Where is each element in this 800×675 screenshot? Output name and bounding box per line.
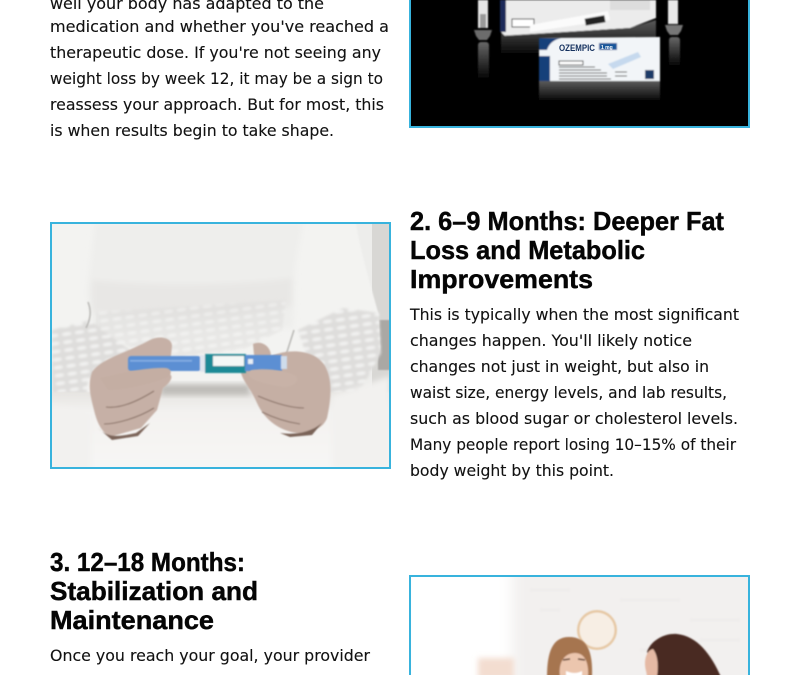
left hand: [90, 338, 172, 440]
section 2 body text: This is typically when the most significant: [409, 305, 739, 324]
table: [52, 392, 332, 467]
front product box: [539, 37, 660, 100]
section 2 body text: changes happen. You'll likely notice: [410, 331, 692, 350]
background wall at right: [372, 224, 389, 383]
bright window area: [411, 577, 512, 675]
section 2 heading: Loss and Metabolic: [410, 235, 645, 265]
left woman: [547, 637, 592, 675]
section 2 body text: waist size, energy levels, and lab results,: [410, 383, 727, 402]
photo: hands holding injection pen: [48, 223, 393, 473]
section 2 heading: 2. 6–9 Months: Deeper Fat: [410, 206, 724, 236]
right hand: [241, 343, 330, 437]
section 3 heading: Maintenance: [50, 605, 214, 635]
section 1 body text: weight loss by week 12, it may be a sign to: [50, 69, 383, 88]
section 2 body text: such as blood sugar or cholesterol levels.: [410, 409, 738, 428]
sweater: [372, 290, 380, 350]
rear product box: [500, 0, 656, 53]
icon: right pen: [665, 0, 683, 67]
section 3 body text: Once you reach your goal, your provider: [50, 646, 370, 665]
section 2 body text: Many people report losing 10–15% of their: [410, 435, 736, 454]
section 3 heading: [50, 547, 258, 635]
section 2 body text: body weight by this point.: [410, 461, 614, 480]
section 2 heading: Improvements: [410, 264, 593, 294]
sweater knit sleeves and waistband: [52, 308, 382, 392]
section 1 body text: reassess your approach. But for most, this: [50, 95, 384, 114]
section 1 body text: medication and whether you've reached a: [50, 17, 389, 36]
section 2 body text: [409, 305, 739, 480]
product label: OZEMPIC: [559, 43, 595, 54]
section 1 body text: is when results begin to take shape.: [50, 121, 334, 140]
section 1 body text: therapeutic dose. If you're not seeing any: [50, 43, 381, 62]
fingers over pen: [130, 367, 282, 375]
section 3 heading: Stabilization and: [50, 576, 258, 606]
photo: Ozempic pens and boxes on black: [410, 0, 749, 127]
section 1 body text: [50, 0, 389, 140]
section 2 heading: [410, 206, 724, 294]
section 3 heading: 3. 12–18 Months:: [50, 547, 245, 577]
right woman: [645, 634, 721, 675]
wall clock: [577, 610, 617, 650]
injection pen: [128, 354, 287, 373]
icon: left pen: [474, 0, 492, 80]
photo: two women talking in a bright room: [409, 575, 750, 675]
folds in sweater: [86, 302, 294, 355]
wall brick texture: [530, 590, 740, 650]
section 2 body text: changes not just in weight, but also in: [410, 357, 709, 376]
photo: Ozempic pens and boxes on black: 1 mg: [601, 45, 613, 51]
